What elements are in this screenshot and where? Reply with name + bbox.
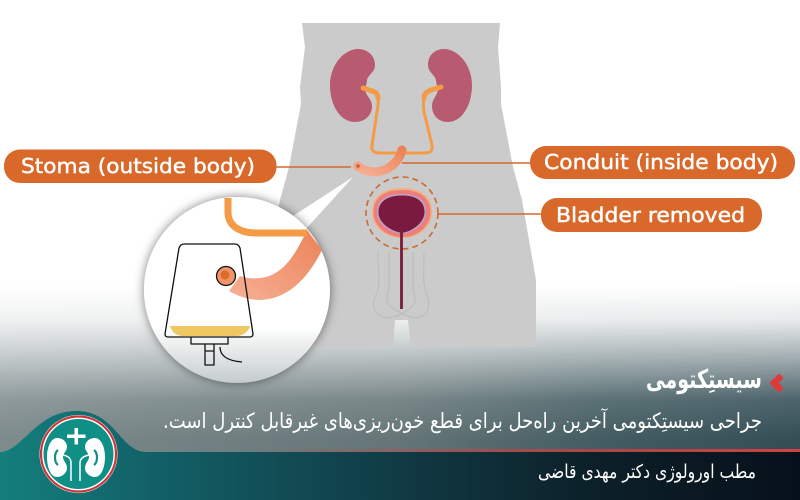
section title: سیستِکتومی <box>646 365 762 395</box>
bladder <box>366 177 438 309</box>
logo left kidney <box>47 438 67 477</box>
ureter in magnified view <box>228 198 307 233</box>
logo ureters <box>63 455 89 481</box>
logo <box>40 415 118 493</box>
logo plus <box>67 428 86 444</box>
bottom fade <box>0 285 800 455</box>
callout wedge <box>293 177 353 230</box>
label: conduit <box>530 146 795 179</box>
conduit with stoma <box>354 150 402 172</box>
logo right kidney <box>85 438 105 477</box>
left kidney <box>330 49 375 122</box>
right kidney <box>428 49 472 122</box>
urine <box>170 326 250 336</box>
label: conduit: Conduit (inside body) <box>544 150 778 174</box>
stoma <box>216 266 236 286</box>
label: stoma <box>4 150 276 183</box>
label: stoma: Stoma (outside body) <box>21 154 255 178</box>
body silhouette <box>266 23 536 347</box>
leader lines <box>276 163 543 214</box>
magnified circle <box>144 197 330 383</box>
red divider <box>250 449 800 452</box>
footer band <box>0 411 800 500</box>
urethra <box>400 232 403 309</box>
urine bag <box>165 244 253 365</box>
label: bladder removed: Bladder removed <box>556 203 745 227</box>
label: bladder removed <box>541 198 762 232</box>
footer clinic name: مطب اورولوژی دکتر مهدی قاضی <box>538 461 756 483</box>
ureters <box>363 87 441 153</box>
section marker chevron <box>770 374 783 392</box>
genital outline <box>374 252 429 318</box>
